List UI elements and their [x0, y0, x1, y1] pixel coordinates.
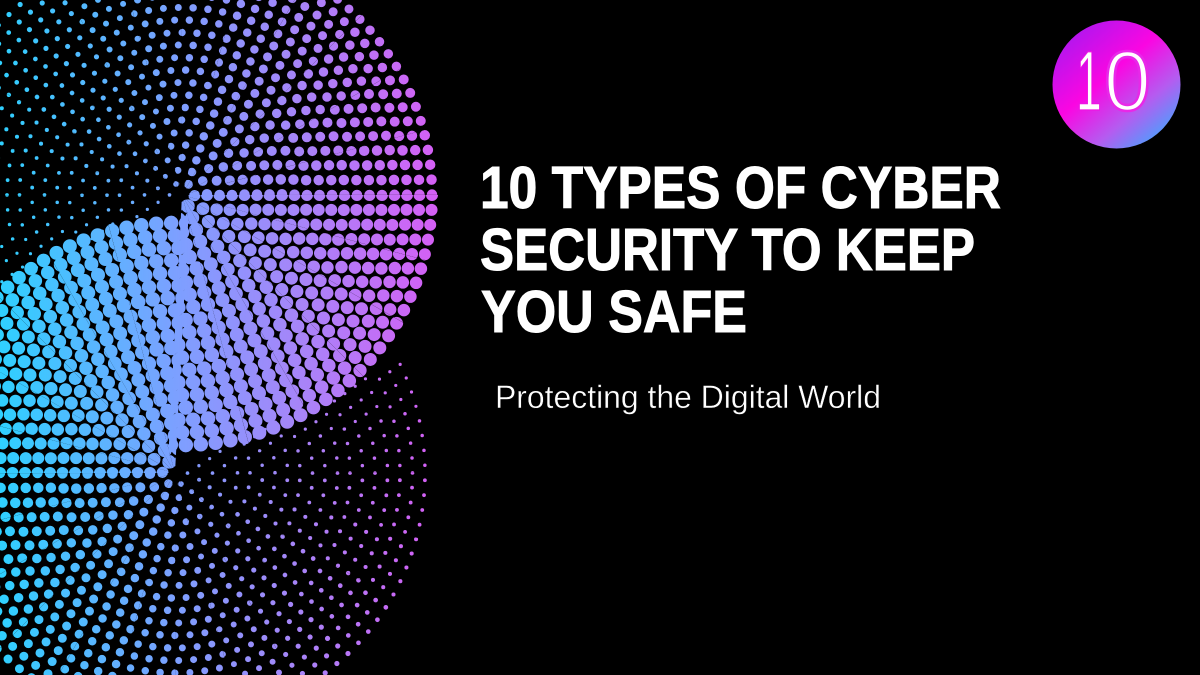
title: YOU SAFE	[481, 279, 747, 345]
badge: number 10: 0	[1104, 34, 1151, 128]
halftone dot graphic	[0, 0, 438, 675]
title: SECURITY TO KEEP	[480, 217, 975, 283]
title	[480, 155, 1001, 345]
subtitle: Protecting the Digital World	[495, 379, 881, 415]
title: 10 TYPES OF CYBER	[480, 155, 1001, 221]
badge: number 10	[1052, 20, 1180, 148]
halftone disc: lower	[0, 223, 425, 675]
badge: number 10: 1	[1076, 36, 1102, 129]
halftone disc: upper	[0, 0, 432, 445]
